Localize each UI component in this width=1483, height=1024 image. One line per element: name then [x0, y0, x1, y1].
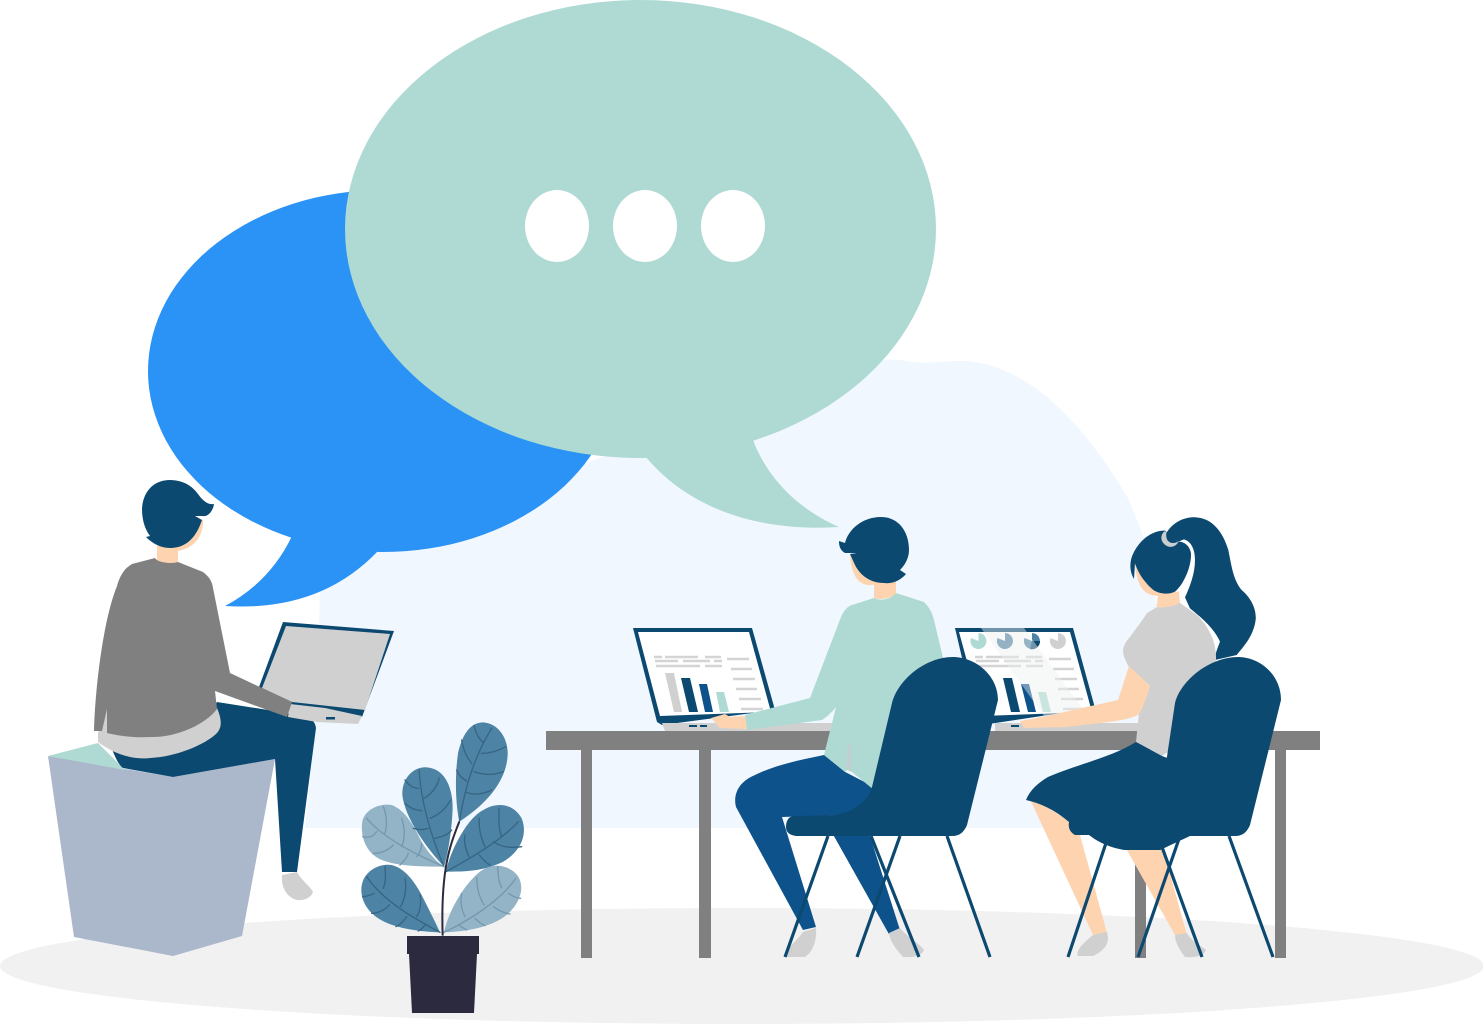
chair legs — [785, 836, 990, 957]
leaf lower right — [444, 866, 521, 932]
laptop with bar chart — [633, 628, 834, 731]
light leaf veins — [363, 807, 521, 932]
leaf top right — [456, 722, 508, 822]
bars — [1003, 678, 1051, 712]
pie charts — [970, 633, 1066, 649]
screen glare — [981, 628, 1085, 716]
chair shell — [786, 657, 998, 836]
leaf left — [362, 805, 444, 867]
top — [1123, 603, 1217, 756]
sweater — [745, 593, 944, 790]
leaf right — [446, 805, 524, 872]
skirt — [1026, 742, 1200, 850]
chair legs — [1068, 836, 1273, 957]
plant foliage — [361, 722, 524, 936]
leaf lower left — [361, 865, 440, 932]
trousers — [735, 755, 900, 934]
laptop with pies and chart — [955, 628, 1140, 731]
block seat — [48, 743, 275, 956]
undershirt — [852, 772, 880, 787]
hair — [142, 480, 214, 548]
pot — [407, 936, 479, 1013]
left person seated on block — [48, 480, 394, 956]
stem — [442, 822, 459, 936]
chair two — [1068, 657, 1281, 957]
hair — [839, 517, 909, 583]
neck — [1157, 592, 1180, 607]
socks and shoes — [785, 928, 924, 957]
sweater slit — [846, 743, 852, 772]
hair tie — [1161, 531, 1179, 547]
head with ponytail — [1130, 517, 1256, 660]
text lines — [975, 657, 1085, 709]
potted plant — [361, 722, 524, 1013]
leaf upper left — [402, 767, 453, 867]
sweater — [94, 558, 292, 737]
laptop — [259, 622, 394, 724]
woman at desk — [1020, 517, 1256, 957]
neck — [157, 546, 178, 563]
speech bubble: teal — [345, 0, 936, 528]
hand — [711, 714, 747, 729]
chair one — [785, 657, 998, 957]
ground shadow — [0, 908, 1483, 1024]
bar chart — [665, 673, 729, 712]
bare legs — [1028, 795, 1187, 935]
undershirt — [98, 705, 221, 758]
dark leaf veins — [363, 726, 522, 932]
trousers — [112, 702, 316, 872]
shoes — [1077, 932, 1206, 957]
head hair — [1130, 531, 1191, 594]
typing dots — [525, 190, 765, 262]
face — [160, 519, 203, 551]
speech bubble: blue — [148, 190, 618, 607]
desk — [546, 731, 1320, 958]
arm — [1020, 666, 1150, 728]
sock and shoe — [282, 872, 313, 900]
ponytail — [1167, 517, 1256, 660]
text lines — [654, 657, 763, 709]
chair shell — [1120, 657, 1281, 850]
face — [850, 555, 880, 585]
man at desk — [711, 517, 944, 957]
face — [1135, 563, 1167, 596]
neck — [874, 575, 896, 599]
pale background blob — [305, 359, 1160, 828]
